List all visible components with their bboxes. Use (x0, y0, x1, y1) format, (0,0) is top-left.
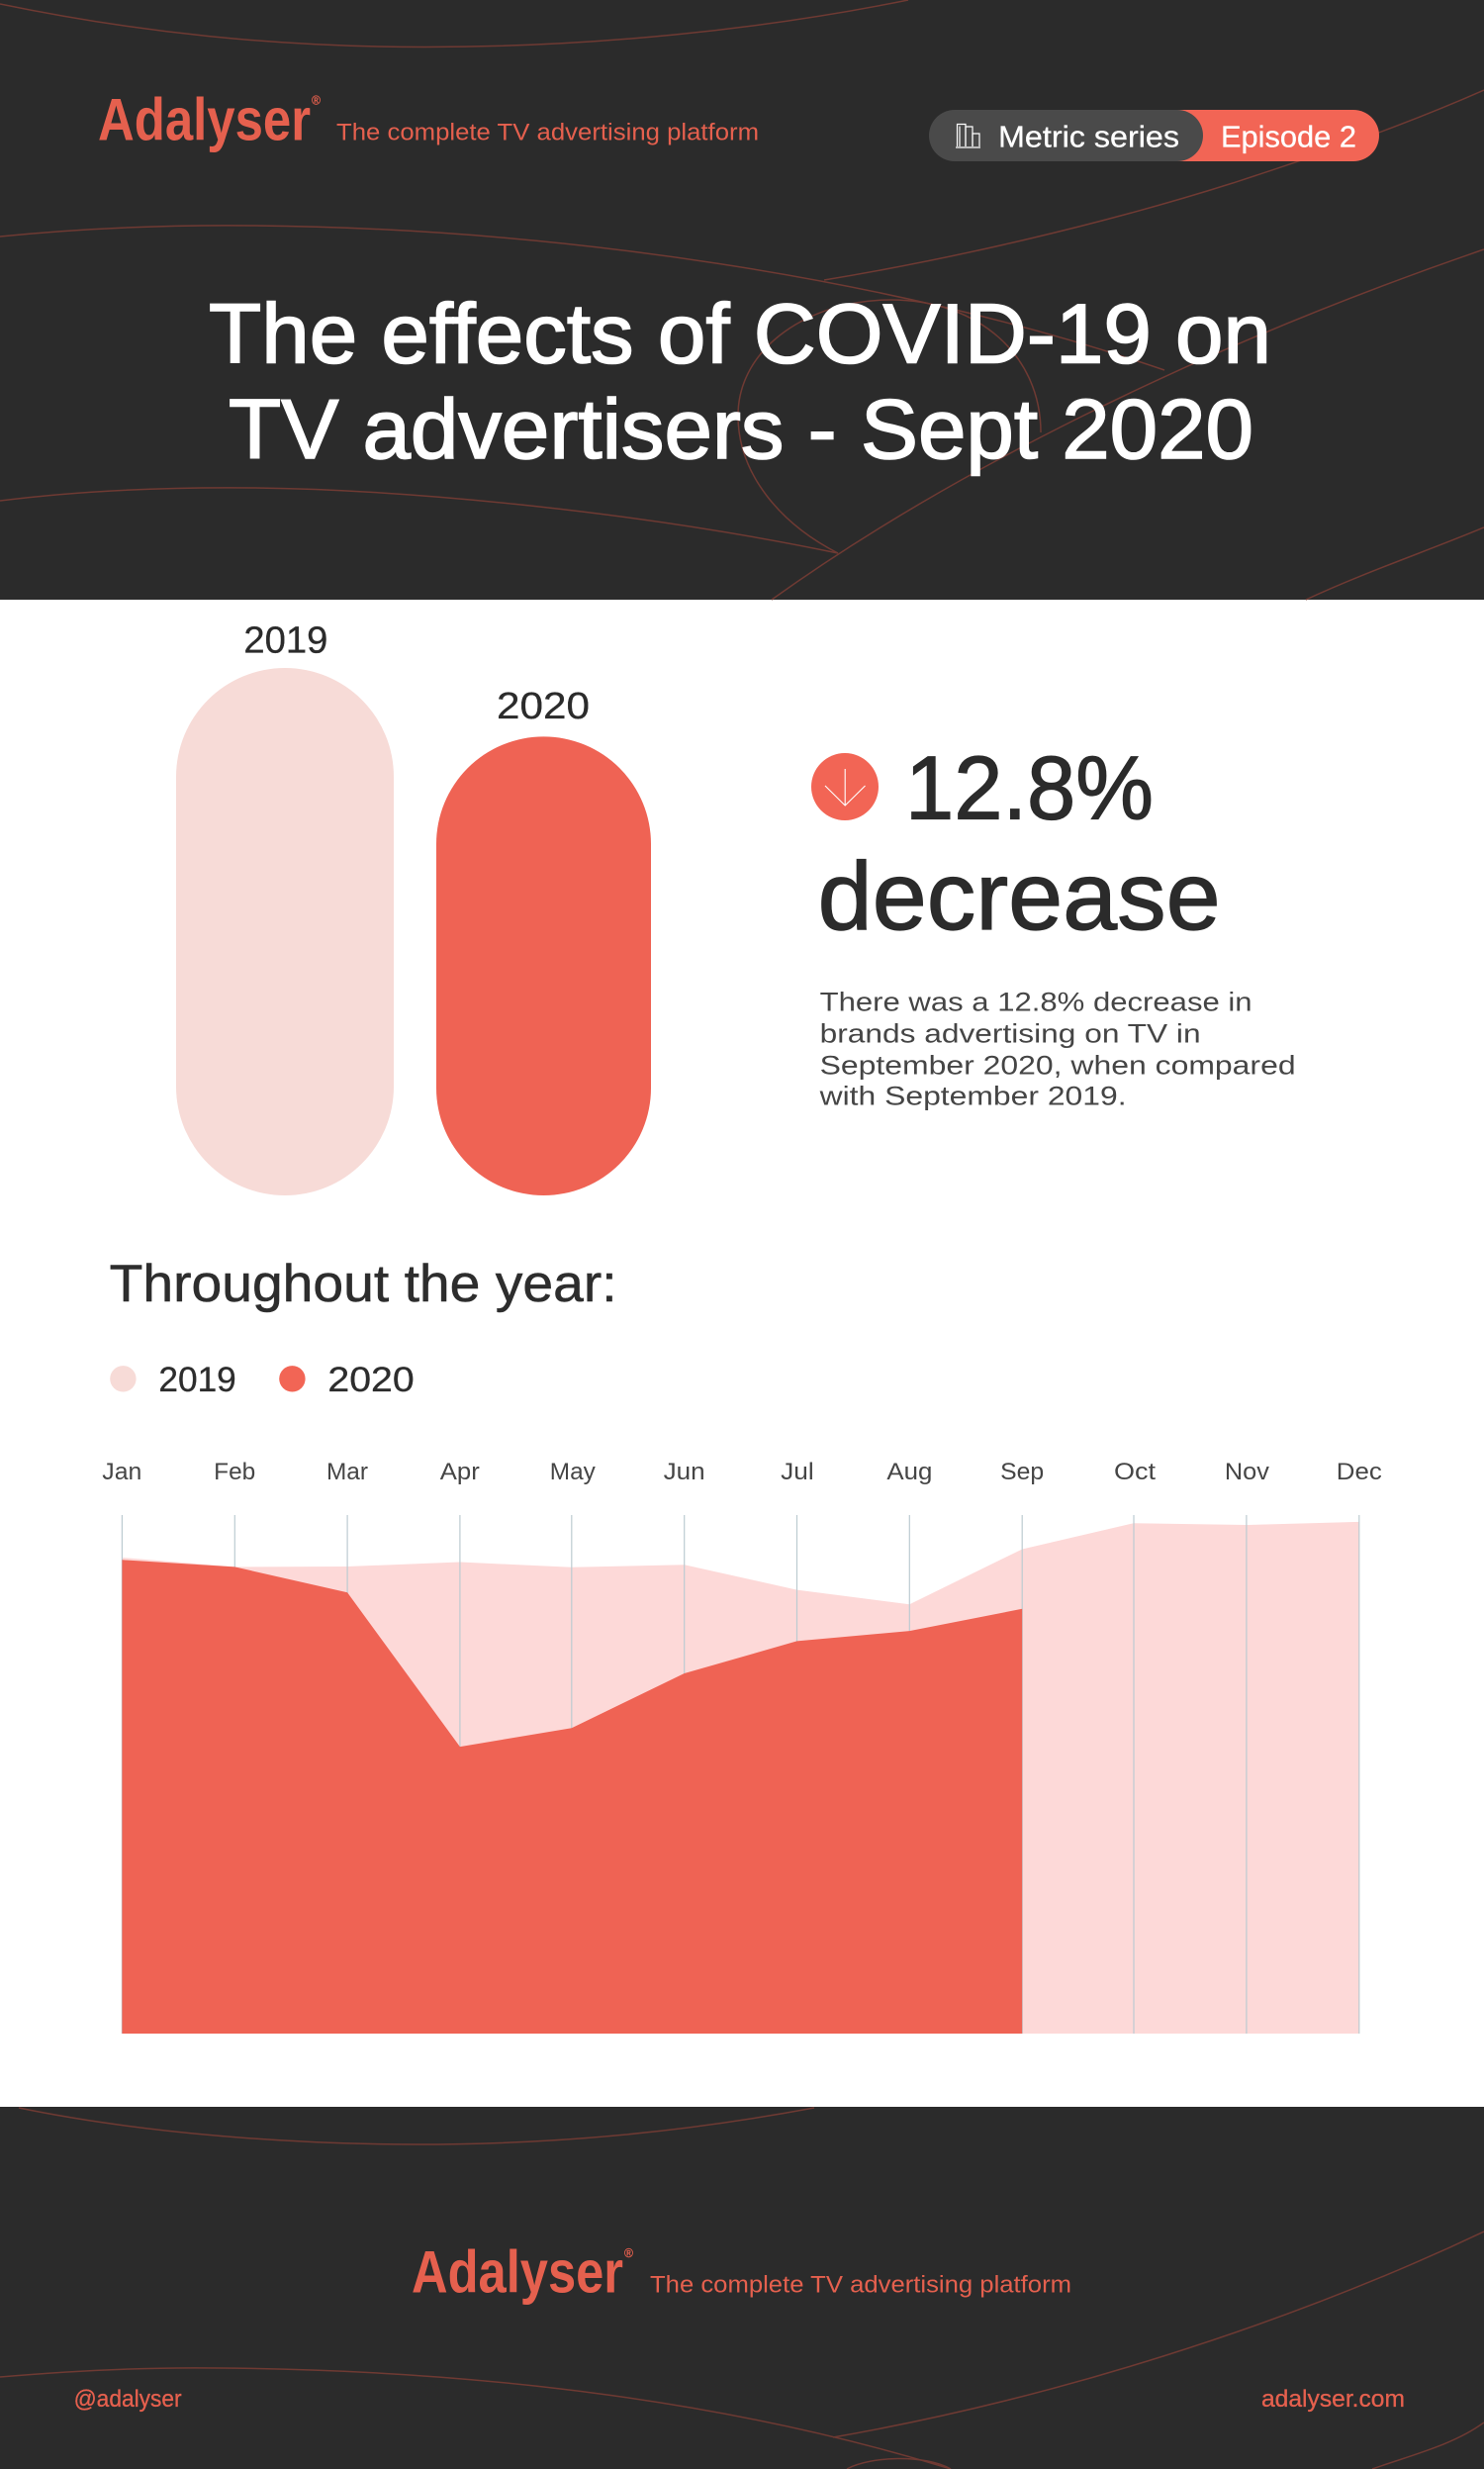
icon: down arrow (811, 753, 879, 820)
axis: month labels: Nov (1225, 1459, 1269, 1485)
description text: brands advertising on TV in (820, 1018, 1201, 1048)
axis: month labels: Dec (1337, 1459, 1382, 1485)
panel: footer (0, 2107, 1484, 2469)
axis: month labels: Mar (326, 1459, 368, 1485)
title (209, 288, 1271, 477)
logo: Adalyser: ® (624, 2245, 633, 2260)
logo: Adalyser: Adalyser (412, 2239, 623, 2306)
axis: month labels: May (550, 1459, 596, 1485)
axis: month labels (102, 1459, 1382, 1485)
description text: September 2020, when compared (820, 1051, 1296, 1081)
title: The effects of COVID-19 on (209, 288, 1271, 382)
axis: month labels: Oct (1114, 1459, 1156, 1485)
heading: Throughout the year: Throughout the year: (110, 1255, 617, 1313)
bar: 2020 (436, 736, 651, 1195)
title: TV advertisers - Sept 2020 (229, 383, 1253, 477)
social handle: @adalyser (74, 2386, 182, 2413)
bar: 2019 (176, 668, 394, 1195)
badge label: Metric series: Metric series (998, 120, 1179, 154)
legend (110, 1361, 415, 1399)
area: 2020 (122, 1560, 1022, 2034)
statistic: 12.8%: 12.8% (905, 739, 1154, 839)
panel: header (0, 0, 1484, 600)
tagline: The complete TV advertising platform (650, 2272, 1071, 2299)
label: 2019: 2019 (243, 619, 327, 661)
label: 2020: 2020 (497, 686, 590, 727)
logo: Adalyser: ® (312, 93, 321, 107)
legend item: 2019 (110, 1361, 236, 1399)
area chart: monthly 2019 vs 2020 (102, 1459, 1382, 2034)
tagline: The complete TV advertising platform (336, 120, 759, 146)
website: adalyser.com (1261, 2386, 1405, 2413)
description text (818, 988, 1296, 1111)
axis: month labels: Feb (214, 1459, 255, 1485)
axis: month labels: Aug (886, 1459, 932, 1485)
chart: pill comparison 2019 vs 2020 (176, 619, 651, 1195)
axis: month labels: Apr (440, 1459, 480, 1485)
description text: There was a 12.8% decrease in (820, 988, 1252, 1017)
legend item: 2020 (279, 1361, 415, 1399)
axis: month labels: Sep (1000, 1459, 1044, 1485)
axis: month labels: Jun (664, 1459, 705, 1485)
badge label: Episode 2: Episode 2 (1221, 120, 1356, 154)
description text: with September 2019. (818, 1082, 1127, 1111)
area: 2019 (122, 1522, 1359, 2034)
icon: bar chart (956, 125, 980, 147)
statistic label: decrease: decrease (818, 842, 1221, 950)
logo: Adalyser: Adalyser (98, 87, 311, 153)
legend item: 2019: 2019 (158, 1361, 236, 1399)
axis: month labels: Jul (781, 1459, 814, 1485)
badge: metric series episode (929, 110, 1379, 161)
legend item: 2020: 2020 (327, 1361, 415, 1399)
axis: month labels: Jan (102, 1459, 141, 1485)
callout: 12.8% decrease (811, 739, 1296, 1111)
